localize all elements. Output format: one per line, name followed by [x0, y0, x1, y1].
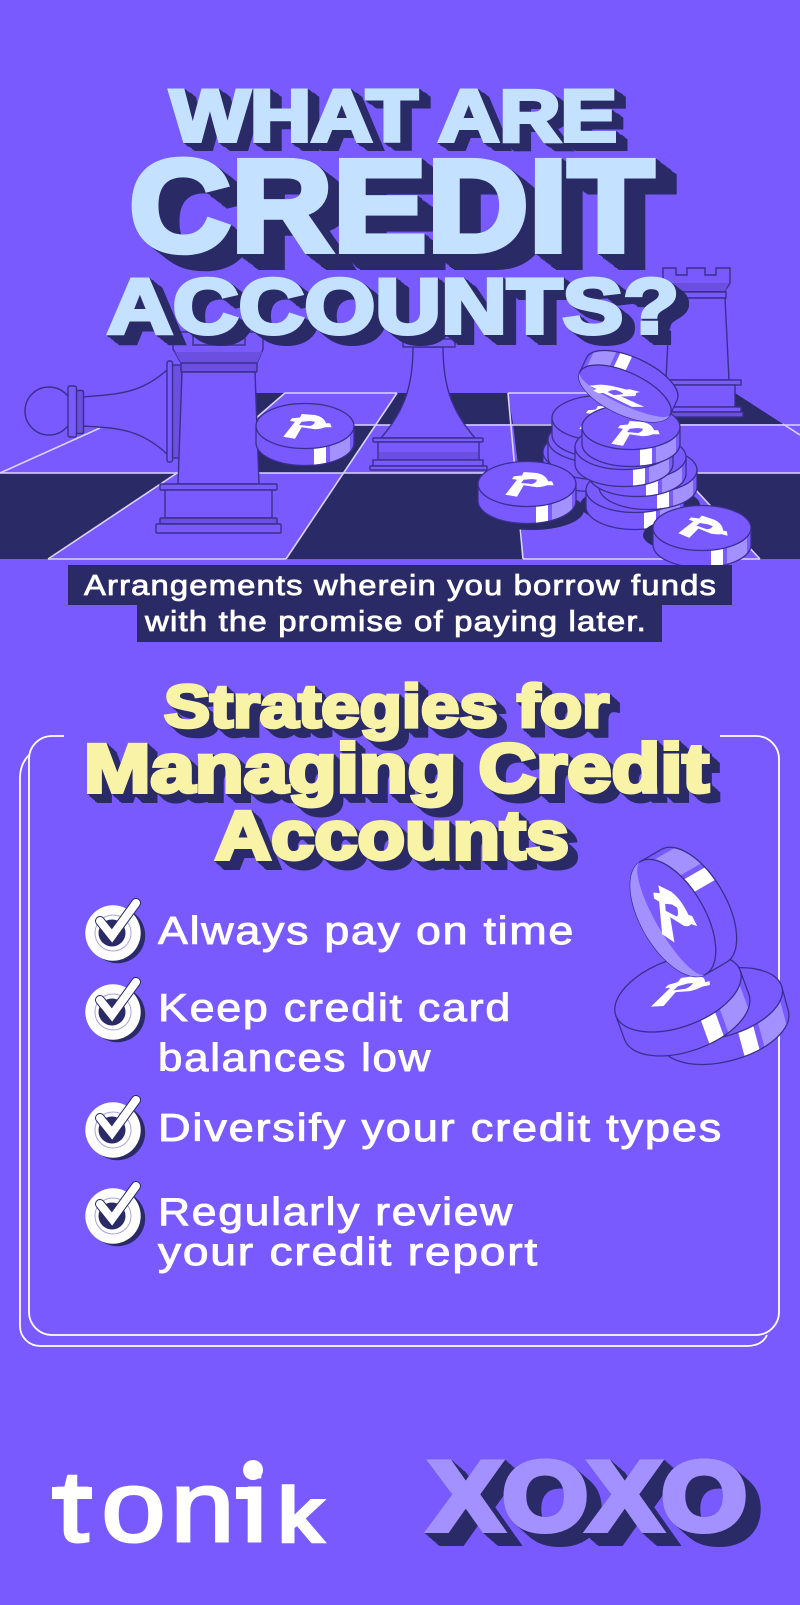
centre chess piece [370, 339, 487, 470]
coin on board [256, 404, 354, 471]
list item 2 [158, 987, 512, 1080]
heading: Managing Credit: Managing Credit [84, 730, 709, 807]
heading: Accounts: Accounts [215, 797, 569, 874]
title: WHAT ARE: WHAT ARE [170, 76, 617, 157]
check icon 3 [85, 1100, 145, 1160]
subtitle: with the promise of paying later. [144, 606, 647, 638]
big rook [156, 332, 281, 533]
logo: XOXO: XOXO [429, 1441, 747, 1551]
list item 2: balances low [158, 1037, 432, 1080]
check icon 1 [85, 903, 145, 963]
fallen pawn [25, 361, 182, 462]
coin lower left [478, 462, 584, 530]
list item 3: Diversify your credit types [158, 1107, 723, 1150]
list item 2: Keep credit card [158, 987, 512, 1030]
list item 4 [158, 1191, 539, 1274]
panel: strategies [20, 736, 779, 1346]
check icon 4 [85, 1186, 145, 1246]
coin lower right [643, 506, 751, 573]
logo: tonik: k [279, 1474, 322, 1558]
check icon 2 [85, 982, 145, 1042]
list item 4: Regularly review [158, 1191, 514, 1234]
list item 4: your credit report [158, 1231, 539, 1274]
heading: Strategies for: Strategies for [164, 673, 609, 740]
subtitle: Arrangements wherein you borrow funds [84, 570, 717, 602]
title: ACCOUNTS?: ACCOUNTS? [107, 262, 679, 350]
subtitle [68, 565, 732, 642]
title: CREDIT: CREDIT [129, 132, 654, 279]
list item 1: Always pay on time [158, 910, 575, 953]
logo: tonik: toni [57, 1450, 267, 1562]
right rook [647, 268, 743, 417]
floating coins [604, 830, 799, 1085]
coin stack [543, 334, 700, 535]
chessboard [0, 393, 800, 559]
